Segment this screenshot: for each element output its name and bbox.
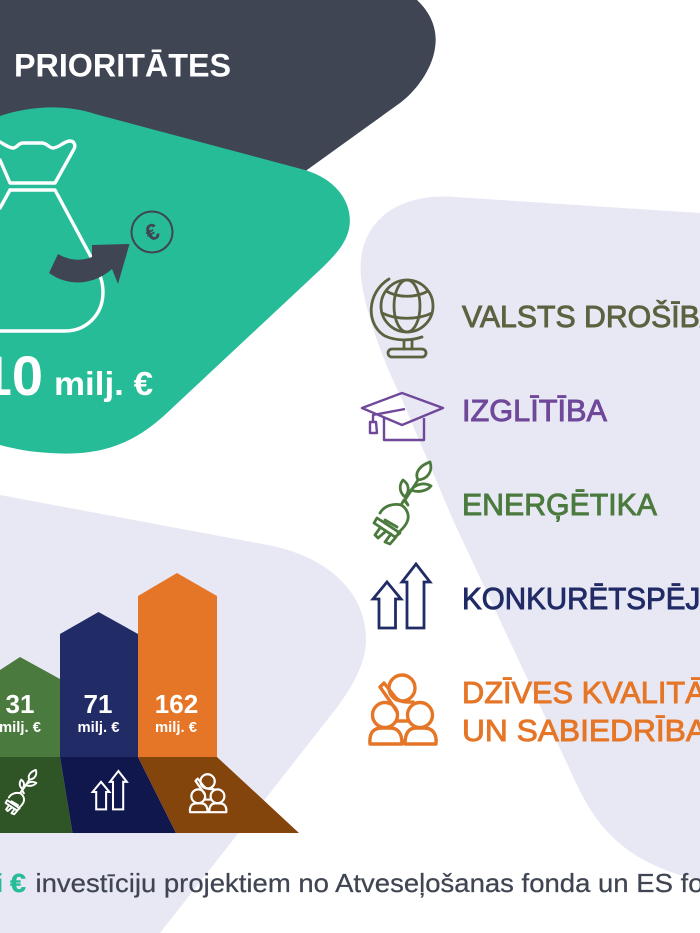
bar: competitiveness 71 bbox=[60, 612, 176, 833]
icon: globe bbox=[371, 279, 433, 357]
priority: energy bbox=[374, 462, 658, 544]
label: IZGLĪTĪBA bbox=[462, 394, 608, 428]
icon: white arrows bbox=[93, 771, 127, 809]
icon: orange people bbox=[370, 675, 436, 744]
total amount: milj. € bbox=[54, 365, 153, 402]
caption text: investīciju projektiem no Atveseļošanas fonda un ES fo bbox=[36, 868, 700, 898]
priority: education bbox=[362, 393, 608, 440]
icon: dark arrow bbox=[49, 244, 130, 284]
chart: priority funding arrows bbox=[0, 573, 299, 833]
bar: quality of life 162 bbox=[138, 573, 299, 833]
bar: quality of life 162: 162 bbox=[155, 689, 198, 719]
bar: energy 31 bbox=[0, 657, 72, 833]
caption text: € bbox=[10, 868, 26, 898]
bar: competitiveness 71: 71 bbox=[84, 689, 112, 719]
priority: national security bbox=[371, 279, 700, 357]
bar: energy 31: milj. € bbox=[0, 719, 42, 736]
panel: dark header shape bbox=[0, 0, 436, 175]
icon: graduation cap bbox=[362, 393, 443, 440]
total amount bbox=[0, 344, 153, 407]
bar: competitiveness 71: milj. € bbox=[78, 719, 120, 736]
priority: quality of life and society bbox=[370, 675, 700, 748]
bar: quality of life 162: milj. € bbox=[155, 719, 198, 736]
heading: priorities: PRIORITĀTES bbox=[14, 48, 231, 84]
icon: white plug bbox=[6, 770, 36, 814]
label: ENERĢĒTIKA bbox=[462, 488, 658, 522]
icon: euro coin bbox=[132, 212, 172, 252]
label lines bbox=[462, 676, 700, 748]
priority: competitiveness bbox=[373, 564, 700, 628]
icon: white people bbox=[190, 774, 226, 812]
label lines: UN SABIEDRĪBA bbox=[462, 714, 700, 748]
icon: navy arrows bbox=[373, 564, 430, 628]
icon: money bag bbox=[0, 141, 103, 331]
icon: euro coin: € bbox=[141, 217, 163, 246]
panel: green budget shape bbox=[0, 107, 350, 454]
panel: right lavender background bbox=[361, 197, 700, 880]
bar: energy 31: 31 bbox=[6, 689, 34, 719]
panel: left lavender background bbox=[0, 495, 366, 933]
icon: plug with leaves bbox=[374, 462, 431, 544]
